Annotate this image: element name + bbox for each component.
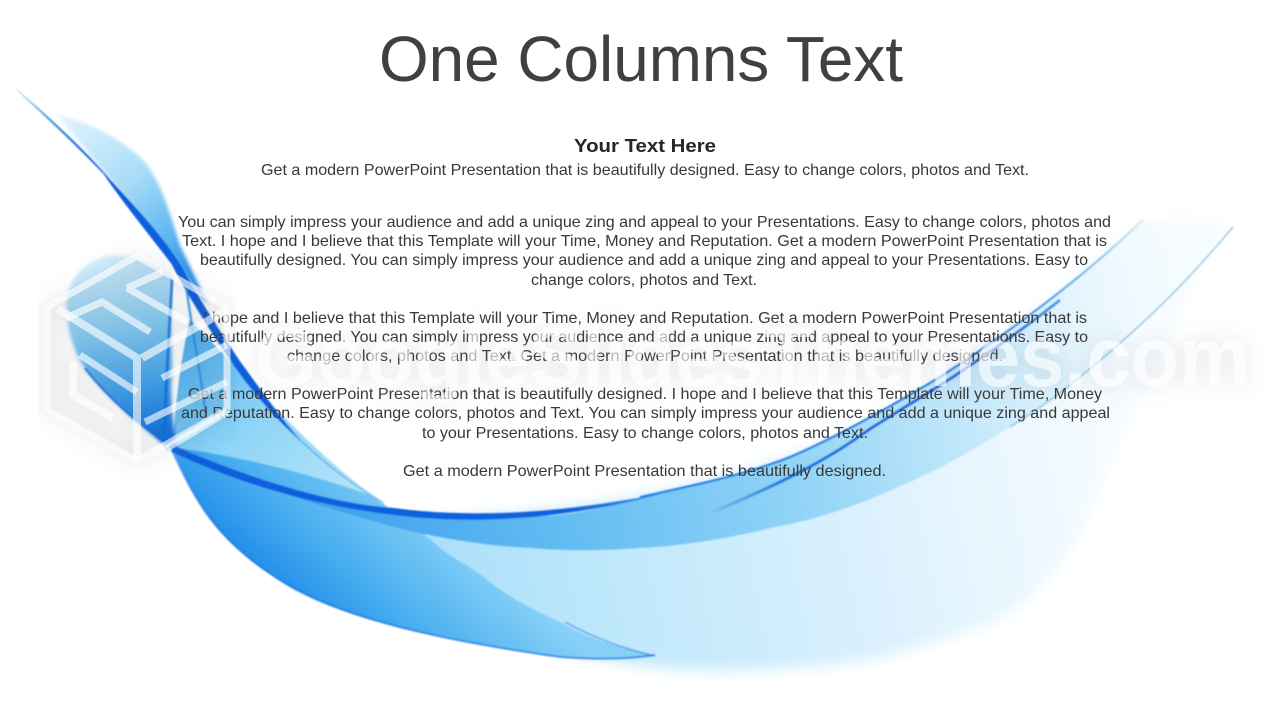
paragraph 1: You can simply impress your audience and add a unique zing and appeal to your Presentations. Easy to change colors, photos and <box>178 214 1111 231</box>
left loop <box>67 255 178 452</box>
right upper strand <box>640 220 1143 497</box>
paragraph 2: beautifully designed. You can simply impress your audience and add a unique zing and appeal to your Presentations. Easy to <box>200 329 1088 346</box>
paragraph 2: change colors, photos and Text. Get a modern PowerPoint Presentation that is beautifully designed. <box>287 348 1003 365</box>
dark upper strand <box>172 445 668 520</box>
paragraph 2: I hope and I believe that this Template will your Time, Money and Reputation. Get a modern PowerPoint Presentation that is <box>203 310 1087 327</box>
paragraph 1 <box>178 214 1111 289</box>
text block: body copy <box>178 136 1111 480</box>
paragraph 3 <box>181 386 1110 442</box>
title: One Columns Text <box>379 23 903 95</box>
paragraph 3: and Reputation. Easy to change colors, photos and Text. You can simply impress your audience and add a unique zing and appeal <box>181 405 1110 422</box>
paragraph 1: beautifully designed. You can simply impress your audience and add a unique zing and appeal to your Presentations. Easy to <box>200 252 1088 269</box>
watermark: site name: GoogleSlidesThemes.com <box>255 310 1250 404</box>
swoosh: blue flowing ribbons <box>15 88 1233 670</box>
closing line: Get a modern PowerPoint Presentation that is beautifully designed. <box>403 463 886 480</box>
diagonal band <box>172 320 430 545</box>
paragraph 1: Text. I hope and I believe that this Template will your Time, Money and Reputation. Get a modern PowerPoint Presentation that is <box>182 233 1107 250</box>
lower edge strand <box>172 450 655 659</box>
paragraph 3: Get a modern PowerPoint Presentation that is beautifully designed. I hope and I believe that this Template will your Time, Money <box>188 386 1102 403</box>
watermark: cube logo <box>43 252 230 465</box>
paragraph 1: change colors, photos and Text. <box>531 272 757 289</box>
diagonal dark strand <box>15 88 300 440</box>
paragraph 3: to your Presentations. Easy to change colors, photos and Text. <box>422 425 868 442</box>
pale feather <box>400 214 1225 670</box>
upper light band <box>55 114 208 305</box>
top ribbon <box>172 220 1233 550</box>
main lower band <box>172 447 655 659</box>
paragraph 2 <box>200 310 1088 365</box>
vertical strands <box>164 278 172 440</box>
intro line: Get a modern PowerPoint Presentation that is beautifully designed. Easy to change colors, photos and Text. <box>261 162 1029 179</box>
subheading: Your Text Here <box>574 136 716 156</box>
loop dark edge <box>85 368 176 450</box>
right dark strand <box>710 300 1060 513</box>
right hair line <box>1010 227 1233 427</box>
